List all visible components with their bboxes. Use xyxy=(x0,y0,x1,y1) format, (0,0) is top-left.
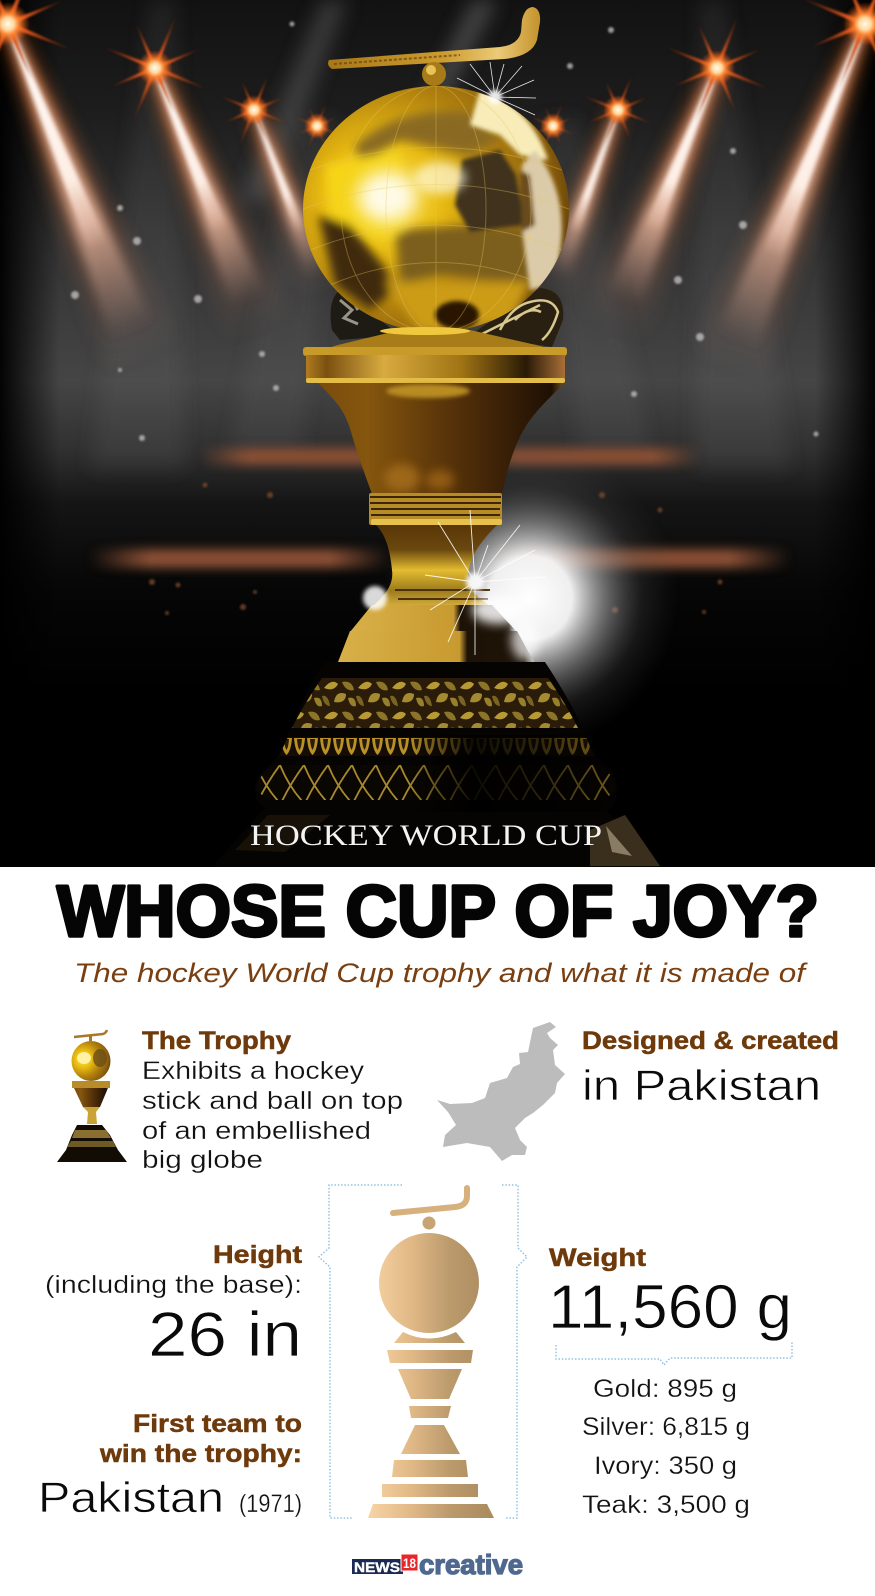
bokeh sparkles xyxy=(71,22,818,441)
lens sparkle on globe xyxy=(457,62,536,115)
ribbed ring xyxy=(369,493,502,525)
material breakdown: Silver: 6,815 g xyxy=(582,1413,750,1441)
heading: First team to xyxy=(133,1410,302,1438)
icon: map of Pakistan xyxy=(437,1022,565,1161)
panel: weight xyxy=(548,1244,792,1519)
stage haze and curtain columns xyxy=(0,0,875,867)
leaf arches band xyxy=(279,737,594,756)
narrow neck xyxy=(372,525,497,607)
panel: first team to win xyxy=(38,1410,302,1522)
value: Pakistan xyxy=(38,1474,224,1522)
panel: height xyxy=(45,1241,303,1370)
year: (1971) xyxy=(239,1490,302,1518)
lens sparkle on neck xyxy=(425,510,546,655)
faint ember specks xyxy=(149,482,722,615)
value: 11,560 g xyxy=(548,1273,792,1342)
footer logo: News18 Creative: NEWS xyxy=(354,1559,400,1575)
material breakdown: Gold: 895 g xyxy=(593,1375,737,1403)
subtitle: The hockey World Cup trophy and what it is made of xyxy=(74,958,808,988)
heading: Weight xyxy=(549,1244,647,1272)
vase body xyxy=(318,383,564,494)
floral band xyxy=(292,678,578,728)
body text xyxy=(142,1057,403,1174)
heading xyxy=(99,1410,302,1468)
material breakdown: Teak: 3,500 g xyxy=(582,1491,750,1519)
cradle filigree xyxy=(331,288,563,347)
footer logo: News18 Creative: 18 xyxy=(403,1555,416,1571)
body text: big globe xyxy=(142,1146,263,1174)
main title: WHOSE CUP OF JOY? xyxy=(57,872,819,952)
icon: gold trophy silhouette xyxy=(368,1188,494,1518)
trophy photo illustration xyxy=(212,7,662,867)
footer logo: News18 Creative xyxy=(352,1549,523,1580)
horizontal light streaks xyxy=(90,448,790,568)
value: 26 in xyxy=(148,1300,302,1370)
body text: of an embellished xyxy=(142,1117,371,1145)
hero caption: HOCKEY WORLD CUP xyxy=(250,819,602,852)
material breakdown xyxy=(582,1375,750,1519)
icon: small trophy photo xyxy=(57,1030,127,1162)
material breakdown: Ivory: 350 g xyxy=(594,1452,737,1480)
stepped shoulders xyxy=(338,586,539,662)
stage light flares xyxy=(0,0,875,165)
body text: stick and ball on top xyxy=(142,1087,403,1115)
heading: The Trophy xyxy=(142,1027,291,1055)
footer logo: News18 Creative: creative xyxy=(419,1549,523,1580)
ornamented base xyxy=(212,662,662,867)
collar with engraved band xyxy=(303,327,567,383)
heading: win the trophy: xyxy=(99,1440,302,1468)
lattice band xyxy=(256,765,616,800)
panel: the trophy xyxy=(57,1027,403,1174)
panel: designed and created xyxy=(437,1022,839,1161)
white glow behind trophy neck xyxy=(380,448,680,748)
dotted bracket under weight xyxy=(556,1342,792,1365)
heading: Designed & created xyxy=(582,1027,839,1055)
shading over lower base xyxy=(255,735,618,812)
dotted bracket around trophy icon xyxy=(319,1185,527,1518)
golden globe xyxy=(303,86,569,332)
spotlight beams xyxy=(0,10,875,381)
heading: Height xyxy=(213,1241,303,1269)
hero photo background xyxy=(0,0,875,867)
value: in Pakistan xyxy=(582,1062,821,1110)
qualifier: (including the base): xyxy=(45,1271,302,1299)
body text: Exhibits a hockey xyxy=(142,1057,365,1085)
hockey stick on top xyxy=(328,7,540,86)
